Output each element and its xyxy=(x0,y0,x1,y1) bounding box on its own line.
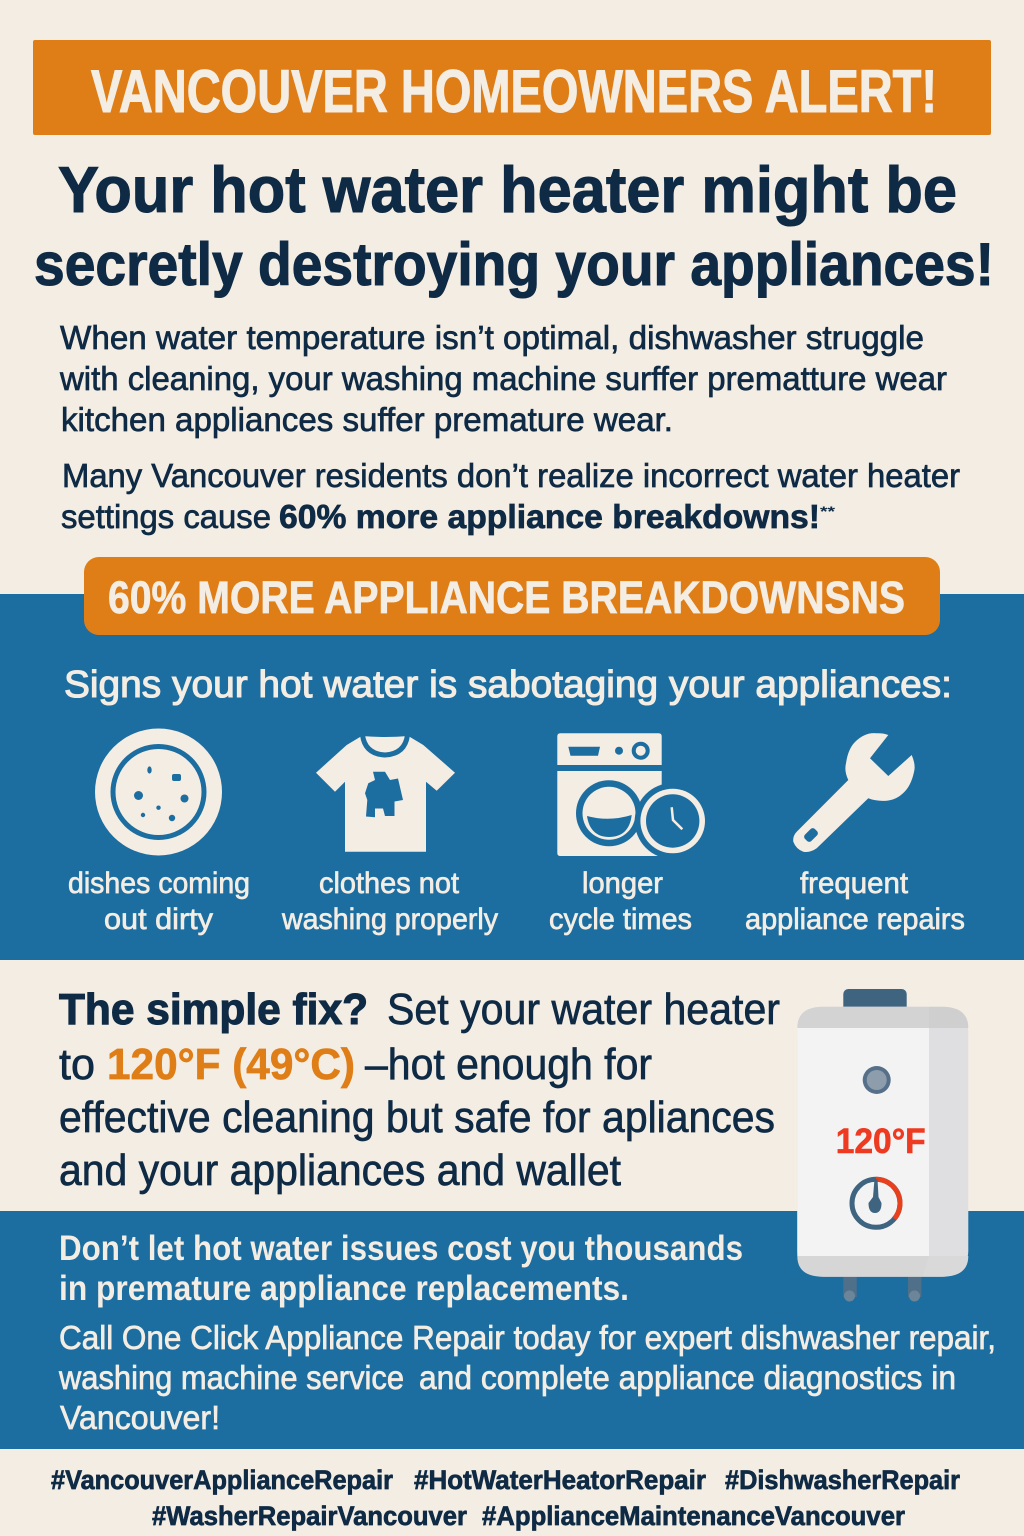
label: dishes coming out dirty: out dirty xyxy=(104,903,213,936)
simple fix text: and your appliances and wallet xyxy=(59,1146,621,1195)
label: dishes coming out dirty xyxy=(68,867,250,936)
icon: water heater xyxy=(797,989,968,1302)
call to action headline xyxy=(59,1229,743,1308)
label: clothes not washing properly: washing properly xyxy=(281,903,498,936)
hashtags: #VancouverApplianceRepair xyxy=(51,1465,393,1495)
icon: washer with clock xyxy=(557,733,711,859)
callout: 60% more breakdowns xyxy=(84,557,940,635)
label: frequent appliance repairs: appliance repairs xyxy=(745,903,965,936)
header banner xyxy=(33,40,991,135)
icon: dirty plate xyxy=(95,728,222,856)
call to action body: and complete appliance diagnostics in xyxy=(419,1359,956,1396)
main title xyxy=(34,153,994,298)
hashtags xyxy=(51,1465,960,1531)
hashtags: #WasherRepairVancouver xyxy=(152,1501,467,1531)
simple fix text: 120°F (49°C) xyxy=(107,1040,355,1089)
simple fix text: to xyxy=(59,1040,95,1089)
label: clothes not washing properly xyxy=(281,867,498,936)
callout: 60% more breakdowns: 60% MORE APPLIANCE BREAKDOWNSNS xyxy=(108,572,905,623)
panel: call to action background xyxy=(0,1211,1024,1449)
intro paragraph: with cleaning, your washing machine surffer prematture wear xyxy=(59,360,947,397)
label: longer cycle times xyxy=(549,867,692,936)
call to action body: washing machine service xyxy=(58,1359,404,1396)
call to action body xyxy=(58,1319,996,1436)
intro paragraph: When water temperature isn’t optimal, dishwasher struggle xyxy=(60,319,924,356)
intro paragraph: kitchen appliances suffer premature wear. xyxy=(61,401,673,438)
hashtags: #DishwasherRepair xyxy=(725,1465,960,1495)
hashtags: #HotWaterHeatorRepair xyxy=(414,1465,706,1495)
call to action headline: in premature appliance replacements. xyxy=(59,1269,629,1308)
icon: wrench xyxy=(793,733,915,852)
panel: signs background xyxy=(0,594,1024,960)
label: frequent appliance repairs xyxy=(745,867,965,936)
simple fix text: The simple fix? xyxy=(59,985,368,1034)
statistic paragraph: ** xyxy=(820,503,836,519)
label: longer cycle times: longer xyxy=(582,867,663,900)
simple fix text: effective cleaning but safe for apliances xyxy=(59,1093,775,1142)
statistic paragraph: settings cause xyxy=(61,498,271,535)
statistic paragraph xyxy=(61,457,960,535)
simple fix text xyxy=(59,985,780,1195)
label: clothes not washing properly: clothes not xyxy=(319,867,460,900)
label: longer cycle times: cycle times xyxy=(549,903,692,936)
call to action body: Call One Click Appliance Repair today for expert dishwasher repair, xyxy=(59,1319,996,1356)
signs heading: Signs your hot water is sabotaging your appliances: xyxy=(64,664,952,706)
statistic paragraph: 60% more appliance breakdowns! xyxy=(279,498,820,535)
main title: Your hot water heater might be xyxy=(58,153,957,226)
label: dishes coming out dirty: dishes coming xyxy=(68,867,250,900)
call to action body: Vancouver! xyxy=(60,1399,220,1436)
icon: stained shirt xyxy=(316,735,455,852)
icon: water heater: 120°F xyxy=(836,1122,926,1161)
simple fix text: Set your water heater xyxy=(387,985,780,1034)
intro paragraph xyxy=(59,319,947,438)
label: frequent appliance repairs: frequent xyxy=(800,867,909,900)
simple fix text: –hot enough for xyxy=(365,1040,652,1089)
hashtags: #ApplianceMaintenanceVancouver xyxy=(482,1501,905,1531)
statistic paragraph: Many Vancouver residents don’t realize incorrect water heater xyxy=(62,457,960,494)
call to action headline: Don’t let hot water issues cost you thousands xyxy=(59,1229,743,1268)
